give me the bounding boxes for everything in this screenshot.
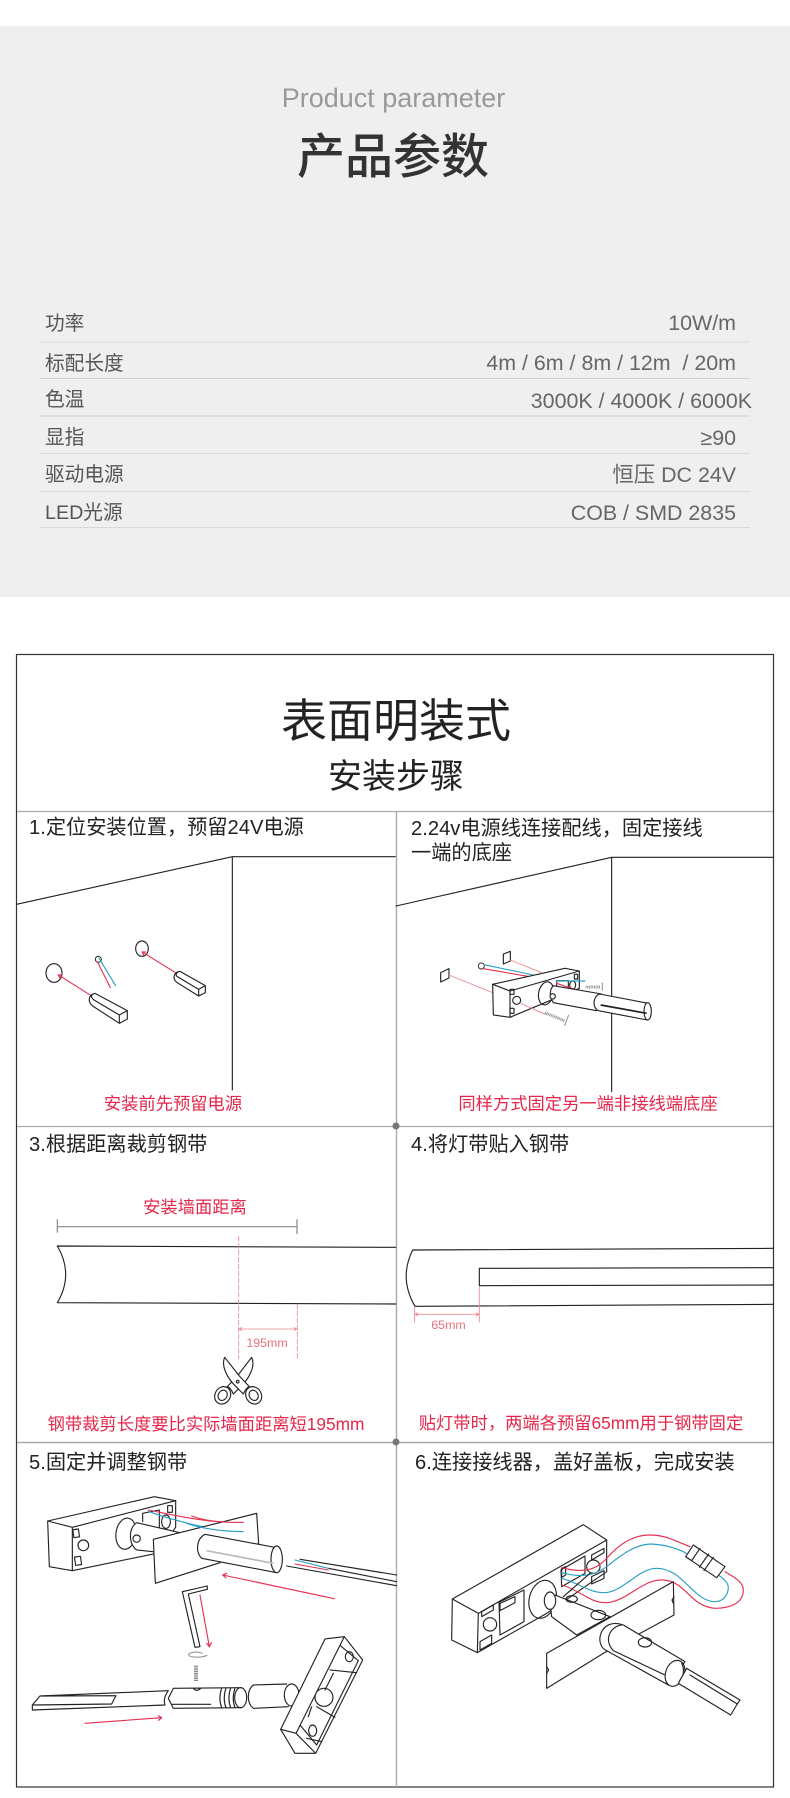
row: CRI [40,426,750,454]
row: CRI: 显指 [45,427,84,449]
row: LED source [40,501,750,528]
tube [198,1534,280,1573]
panel: step 6 [415,1451,743,1715]
step 6 diagram [452,1525,743,1715]
heading: 表面明装式: 表面明装式 [281,695,511,747]
upper wires [562,1535,690,1570]
allen key [182,1586,207,1647]
step 5 text: 5.固定并调整钢带 [29,1451,187,1474]
step 4 diagram [406,1248,773,1322]
step 4 text: 4.将灯带贴入钢带 [411,1133,569,1156]
step 5 diagram [32,1497,397,1753]
step 3 diagram [57,1219,396,1407]
row: lengths: 标配长度 [45,353,124,375]
heading: 安装步骤: 安装步骤 [328,758,464,796]
panel: step 4 [406,1133,773,1433]
tube 1 [551,1595,610,1635]
connector [686,1545,725,1578]
measurement label: 安装墙面距离 [143,1197,247,1217]
row: colour temperature [40,389,753,416]
step 1 caption: 安装前先预留电源 [104,1094,242,1114]
row: colour temperature: 色温 [45,389,84,411]
row: power [40,311,750,342]
panel: step 3 [29,1133,396,1434]
step 1 diagram [17,857,395,1090]
row: CRI: ≥90 [700,426,736,450]
mid tube [168,1688,242,1708]
panel: installation frame [16,654,774,1787]
row: power: 10W/m [668,311,736,335]
arrow [223,1573,334,1599]
step 1 text: 1.定位安装位置，预留24V电源 [29,816,304,839]
spring [190,1666,202,1681]
row: LED source: LED光源 [45,502,123,524]
icon: scissors [212,1357,265,1407]
step 4 caption: 贴灯带时，两端各预留65mm用于钢带固定 [419,1413,743,1433]
panel: step 5 [29,1451,397,1753]
step 2 caption: 同样方式固定另一端非接线端底座 [458,1094,718,1114]
plate [153,1513,259,1583]
wires [148,1510,243,1522]
heading: 产品参数: 产品参数 [297,131,489,184]
arrow [85,1716,162,1723]
lower strip [32,1691,168,1710]
panel: product parameter [0,26,790,597]
step 6 text: 6.连接接线器，盖好盖板，完成安装 [415,1451,735,1474]
panel: step 2 [396,817,773,1114]
row: colour temperature: 3000K / 4000K / 6000K [531,389,753,413]
base block [452,1525,607,1653]
screws [545,987,601,1021]
row: driver [40,463,750,492]
row: LED source: COB / SMD 2835 [571,501,736,525]
row: power: 功率 [45,313,84,335]
step 3 caption: 钢带裁剪长度要比实际墙面距离短195mm [48,1414,364,1434]
step 2 text: 一端的底座 [411,842,512,864]
dimension: 195mm: 195mm [246,1336,288,1350]
row: driver: 恒压 DC 24V [612,463,737,487]
base block [48,1497,200,1571]
strip [287,1559,397,1586]
subtitle: Product parameter: Product parameter [282,83,505,113]
strip [678,1668,740,1715]
lower wires [562,1572,743,1608]
panel: step 1 [17,816,395,1114]
end base [281,1637,363,1753]
row: driver: 驱动电源 [45,464,124,486]
tube 2 [600,1623,685,1685]
row: lengths: 4m / 6m / 8m / 12m / 20m [486,351,736,375]
parameter table [40,311,753,528]
step 2 diagram [396,857,773,1092]
plate [547,1582,674,1688]
step 3 text: 3.根据距离裁剪钢带 [29,1133,207,1156]
row: lengths [40,351,750,379]
dimension: 65mm: 65mm [431,1318,466,1332]
step 2 text: 2.24v电源线连接配线，固定接线 [411,817,703,840]
